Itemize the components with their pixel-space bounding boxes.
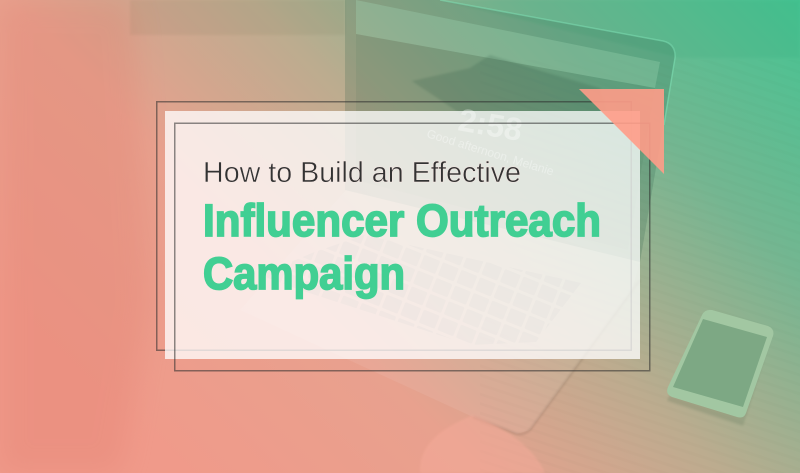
laptop screen bezel [345, 0, 675, 262]
title line two: Campaign [203, 248, 405, 299]
laptop base edge [473, 280, 640, 434]
screen island [412, 55, 610, 125]
phone body [667, 310, 773, 418]
laptop top edge highlight [440, 0, 675, 125]
title [203, 157, 601, 299]
laptop base [240, 190, 640, 434]
laptop screen [356, 0, 660, 88]
front frame [175, 123, 650, 371]
subtitle line: How to Build an Effective [203, 157, 521, 189]
coral corner triangle [579, 89, 664, 174]
person silhouette on left [0, 0, 150, 473]
clock on screen: 2:58 [456, 101, 525, 148]
hand at bottom [420, 415, 545, 473]
dark wall above desk at top left [130, 0, 345, 35]
keyboard [260, 235, 581, 345]
screen photo area [356, 34, 655, 250]
phone shadow [667, 316, 772, 426]
greeting on screen: Good afternoon, Melanie [425, 126, 556, 179]
back frame [157, 102, 631, 350]
title line one: Influencer Outreach [203, 195, 601, 246]
dark band at top right [440, 0, 800, 58]
desk grain [480, 60, 800, 473]
phone screen [673, 319, 767, 407]
translucent white panel [165, 111, 640, 359]
